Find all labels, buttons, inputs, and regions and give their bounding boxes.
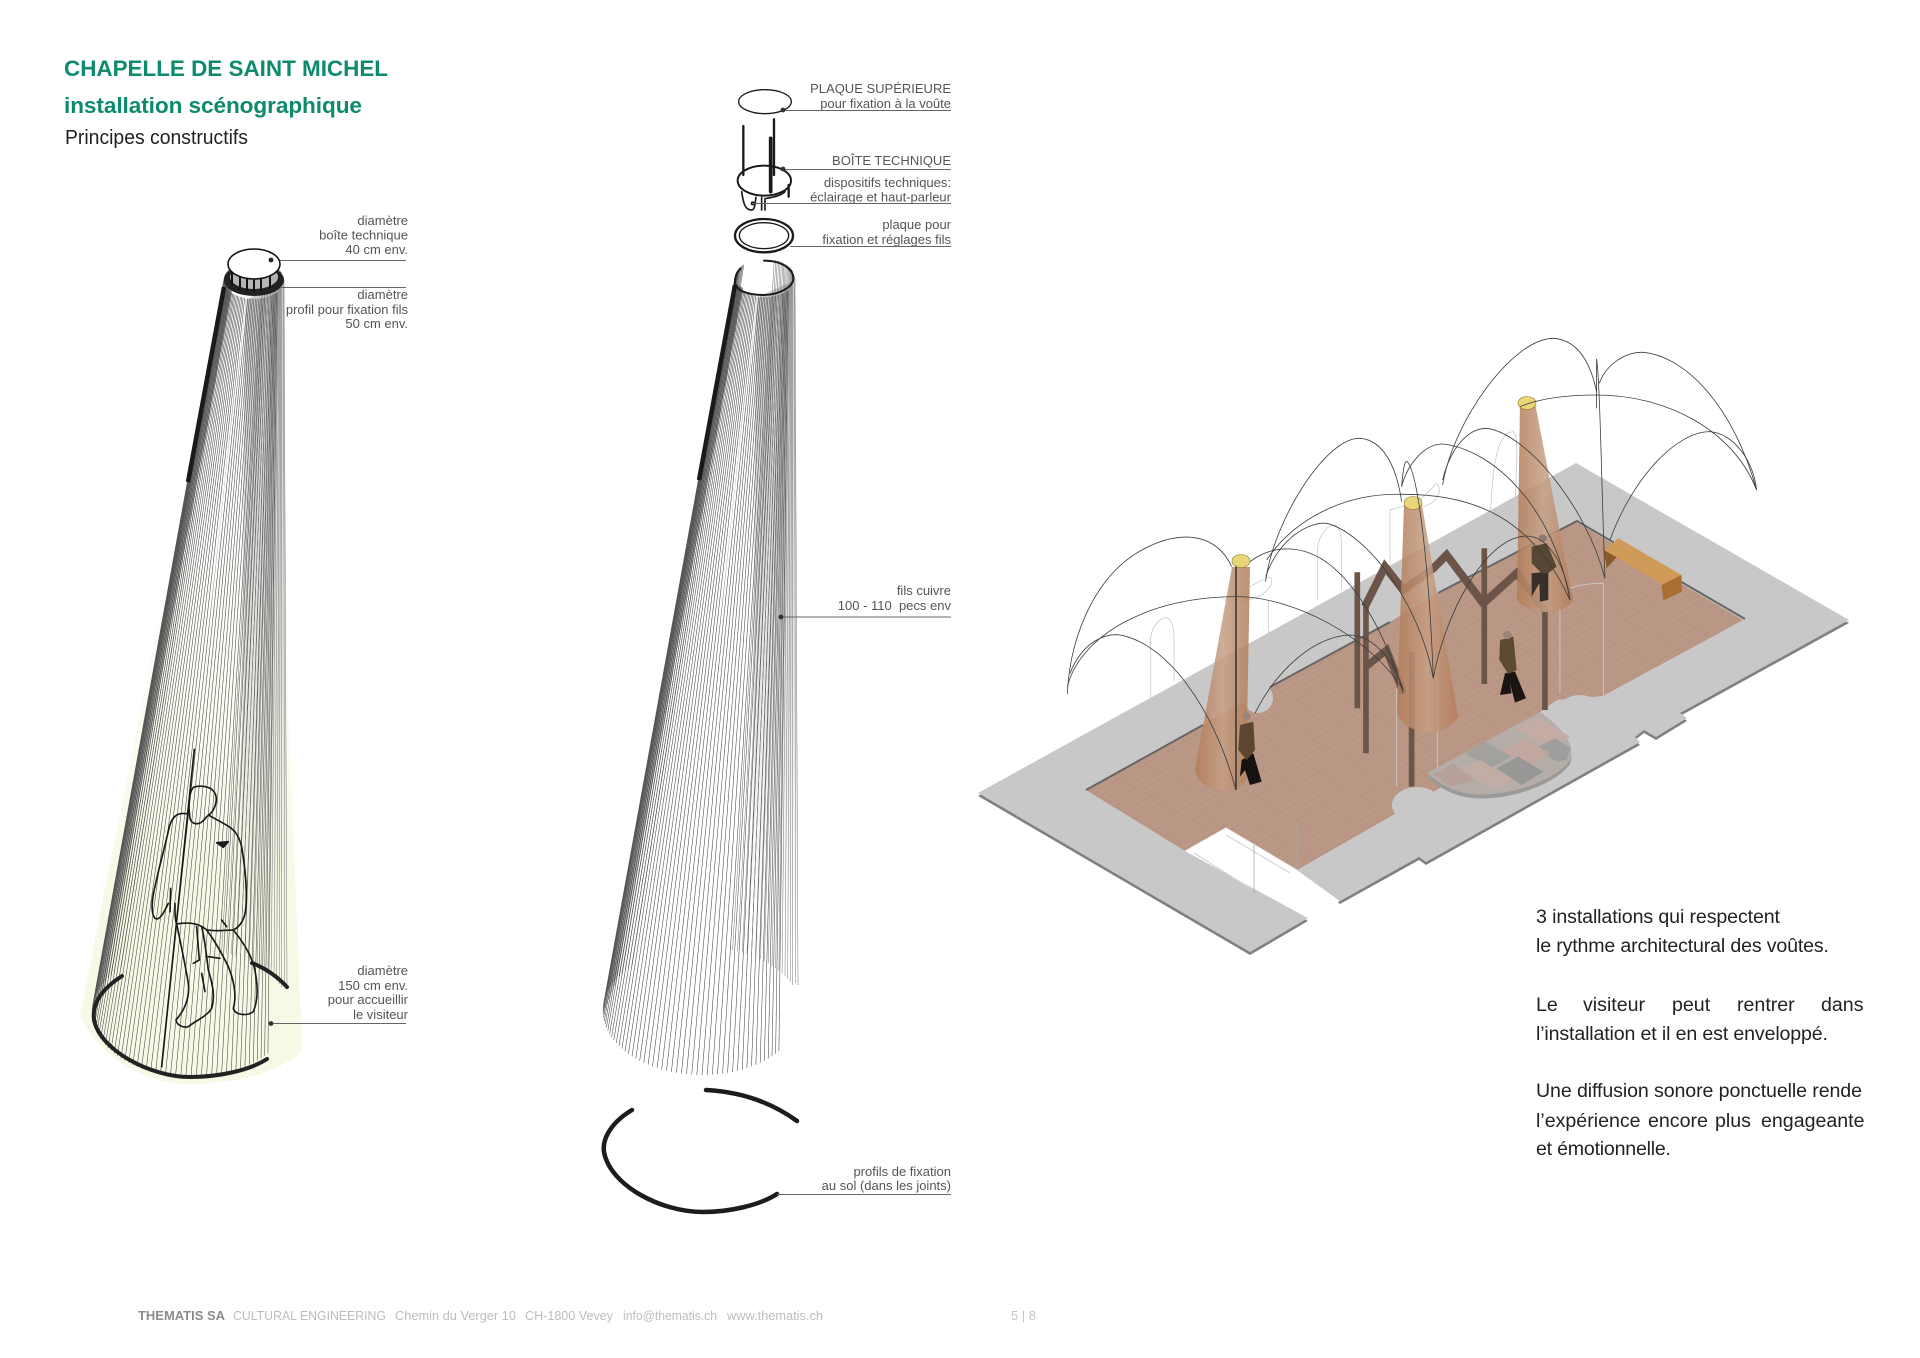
- panel: exploded cone: [603, 90, 798, 1212]
- paragraph: [1536, 906, 1865, 1160]
- exploded top components: [735, 90, 793, 295]
- wires of the exploded cone: [603, 260, 798, 1075]
- paragraph line 3: rentrer: [1737, 994, 1795, 1016]
- label: top plate: pour fixation à la voûte: [820, 96, 951, 111]
- paragraph line 1: 3 installations qui respectent: [1536, 906, 1781, 928]
- rods: [743, 119, 789, 197]
- vault arcs: [1067, 338, 1757, 790]
- label: base diameter: [269, 963, 409, 1026]
- label: box diameter: [280, 213, 408, 260]
- paragraph line 6: l’expérience: [1536, 1110, 1641, 1132]
- halo behind cone: [80, 290, 302, 1084]
- ghost arches: [1151, 432, 1603, 787]
- semicircular stone platform: [1427, 712, 1571, 799]
- label: top plate: [781, 81, 951, 112]
- label: base diameter: le visiteur: [353, 1007, 409, 1022]
- brown Gothic arches: [1357, 548, 1545, 787]
- wall base lines: [1086, 521, 1745, 790]
- label: floor profiles: profils de fixation: [853, 1164, 951, 1179]
- label: copper wires: [779, 583, 951, 619]
- footer: [138, 1308, 1036, 1323]
- paragraph line 3: dans: [1821, 994, 1864, 1016]
- paragraph line 6: engageante: [1761, 1110, 1865, 1132]
- company address: CH-1800 Vevey: [525, 1308, 613, 1323]
- slab thickness: [978, 466, 1849, 955]
- cone installation 2: [1397, 505, 1458, 733]
- door opening: [1185, 822, 1340, 918]
- label: fixing plate: [790, 217, 952, 247]
- page number: 5 | 8: [1011, 1308, 1036, 1323]
- gold cap tops: [1232, 396, 1536, 568]
- person beside cone 1: [1238, 713, 1262, 785]
- person in cone 3: [1532, 534, 1557, 602]
- paragraph line 6: encore: [1648, 1110, 1708, 1132]
- cone opening: [735, 261, 793, 295]
- panel: axonometric view of the chapel: [978, 338, 1849, 955]
- label: base diameter: pour accueillir: [328, 992, 409, 1007]
- label: technical box: éclairage et haut-parleur: [810, 190, 952, 204]
- label: copper wires: 100 - 110 pecs env: [838, 598, 951, 613]
- subtitle: installation scénographique: [64, 93, 362, 118]
- paragraph line 3: peut: [1672, 994, 1711, 1016]
- paragraph line 7: et émotionnelle.: [1536, 1138, 1671, 1160]
- company address: [233, 1308, 823, 1323]
- company name: THEMATIS SA: [138, 1308, 226, 1323]
- side bays: [1243, 683, 1605, 823]
- label: floor profiles: [777, 1164, 951, 1194]
- wires of the cone: [92, 262, 287, 1077]
- label: profile diameter: 50 cm env.: [345, 316, 408, 331]
- fixing ring: [735, 219, 793, 252]
- label: profile diameter: [280, 287, 408, 331]
- top plate: [739, 90, 791, 114]
- people: [1499, 534, 1557, 703]
- cone installation 3: [1517, 403, 1573, 612]
- label: fixing plate: fixation et réglages fils: [822, 232, 951, 247]
- label: technical box: BOÎTE TECHNIQUE: [832, 153, 951, 168]
- person standing: [1499, 631, 1526, 703]
- section heading: Principes constructifs: [65, 127, 248, 149]
- title block: [64, 56, 388, 149]
- paragraph line 3: visiteur: [1583, 994, 1646, 1016]
- panel: assembled cone with visitor: [80, 249, 302, 1084]
- grey floor slab: [978, 463, 1849, 952]
- visitor figure: [152, 749, 257, 1067]
- cone installation 1: [1195, 567, 1250, 791]
- brick floor: [1086, 522, 1743, 870]
- paragraph line 4: l’installation et il en est enveloppé.: [1536, 1023, 1828, 1045]
- labels: assembled cone: [269, 213, 409, 1026]
- technical box: [742, 192, 785, 210]
- company address: CULTURAL ENGINEERING: [233, 1308, 386, 1323]
- paragraph line 3: Le: [1536, 994, 1558, 1016]
- label: box diameter: diamètre: [357, 213, 408, 228]
- bench: [1604, 538, 1682, 601]
- company address: www.thematis.ch: [726, 1308, 823, 1323]
- label: copper wires: fils cuivre: [897, 583, 951, 598]
- title: CHAPELLE DE SAINT MICHEL: [64, 56, 388, 81]
- label: top plate: PLAQUE SUPÉRIEURE: [810, 81, 951, 96]
- label: fixing plate: plaque pour: [882, 217, 952, 232]
- labels: exploded cone: [752, 81, 952, 1194]
- paragraph line 5: Une diffusion sonore ponctuelle rende: [1536, 1080, 1862, 1102]
- label: base diameter: 150 cm env.: [338, 978, 408, 993]
- paragraph line 6: plus: [1715, 1110, 1751, 1132]
- floor fixing profiles: [604, 1090, 797, 1212]
- floor fixing profiles: [94, 963, 287, 1077]
- label: base diameter: diamètre: [357, 963, 408, 978]
- label: floor profiles: au sol (dans les joints): [822, 1178, 951, 1193]
- paragraph line 2: le rythme architectural des voûtes.: [1536, 935, 1829, 957]
- label: technical box: dispositifs techniques:: [824, 175, 951, 190]
- label: technical box: [752, 153, 952, 204]
- label: profile diameter: diamètre: [357, 287, 408, 302]
- technical box and ring: [224, 249, 284, 296]
- label: profile diameter: profil pour fixation fils: [286, 302, 408, 317]
- label: box diameter: 40 cm env.: [345, 242, 408, 257]
- company address: Chemin du Verger 10: [395, 1308, 516, 1323]
- label: box diameter: boîte technique: [319, 228, 408, 242]
- company address: info@thematis.ch: [623, 1308, 717, 1323]
